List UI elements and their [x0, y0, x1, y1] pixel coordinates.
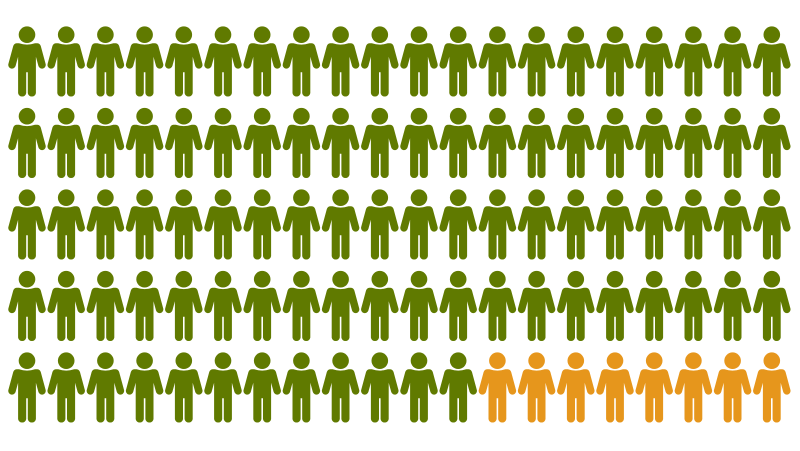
row 2: green people — [8, 108, 791, 178]
row 4: green people — [8, 271, 791, 341]
row 3: green people — [8, 189, 791, 260]
row 5: orange people — [479, 352, 791, 423]
row 1: green people — [8, 26, 791, 97]
row 5: green people — [8, 352, 477, 423]
